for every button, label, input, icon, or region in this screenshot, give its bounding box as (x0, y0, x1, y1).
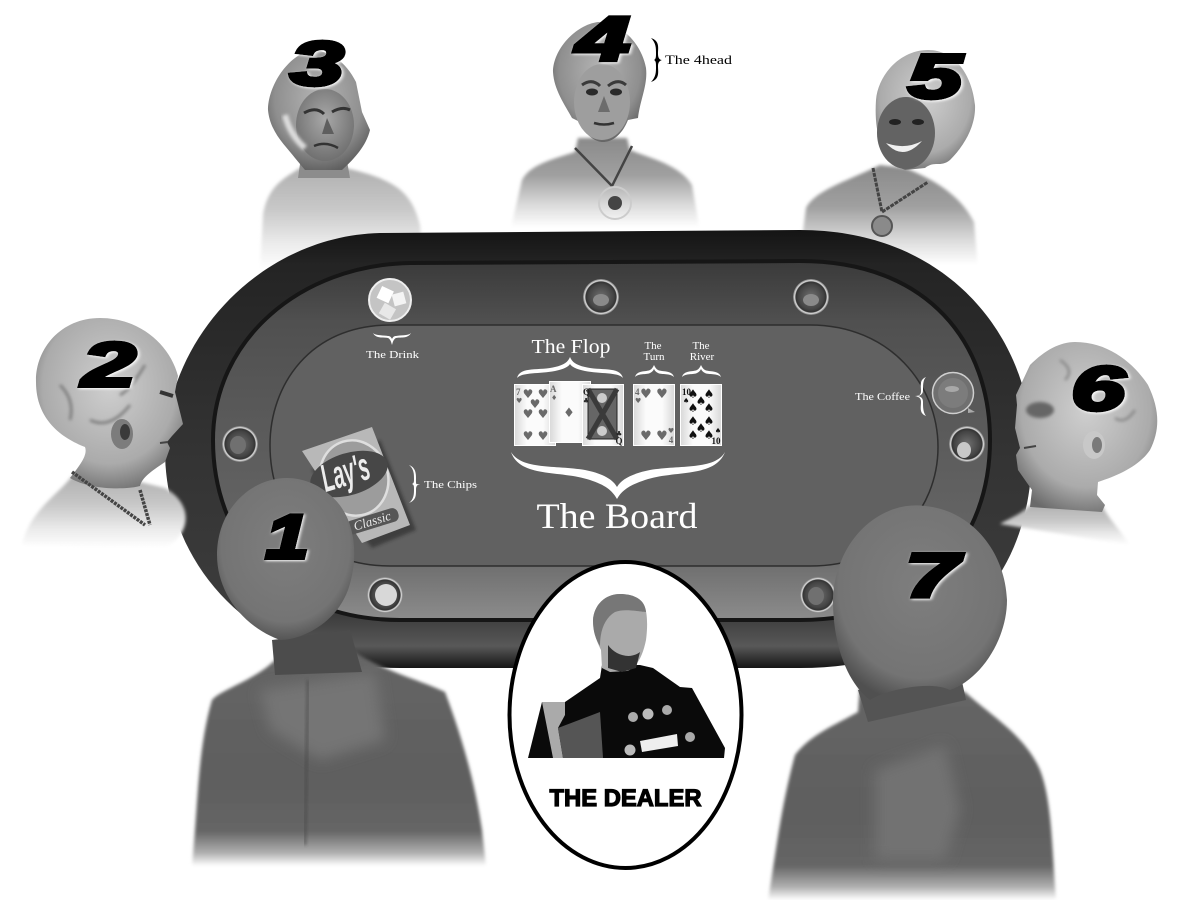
label: the flop: The Flop (532, 336, 610, 358)
player 7 (768, 505, 1056, 900)
card: ten of spades (the river): ♠ (688, 414, 698, 428)
card: ace of diamonds: ♦ (551, 394, 557, 402)
number 2: 2 (80, 331, 136, 400)
brace: drink (373, 333, 411, 345)
label: the coffee: The Coffee (855, 391, 910, 403)
card: seven of hearts: ♥ (538, 387, 548, 401)
cup holder (800, 577, 836, 613)
dealer label: THE DEALER (550, 785, 702, 812)
card: four of hearts (the turn): 4 (669, 435, 674, 445)
brace: coffee (915, 377, 926, 416)
card: ten of spades (the river): ♠ (704, 414, 714, 428)
card: ten of spades (the river): ♠ (688, 387, 698, 401)
label: the turn: The (644, 340, 662, 352)
card: four of hearts (the turn): ♥ (640, 429, 652, 444)
card: ten of spades (the river): ♠ (683, 397, 689, 405)
cup holder (367, 577, 403, 613)
card: four of hearts (the turn): ♥ (656, 387, 668, 402)
card: ten of spades (the river): ♠ (696, 394, 706, 408)
wood rail (213, 261, 990, 620)
card: ten of spades (the river): 10 (682, 387, 692, 397)
cup holder with ice (369, 279, 411, 321)
bag of chips (302, 427, 416, 548)
number 4: 4 (574, 5, 630, 74)
card: seven of hearts (514, 384, 556, 446)
number 7: 7 (905, 542, 964, 611)
player 4 (510, 22, 700, 232)
card: seven of hearts: ♥ (523, 387, 533, 401)
label: the turn: Turn (644, 351, 665, 363)
label: the drink: The Drink (366, 349, 420, 361)
dealer oval (510, 562, 742, 868)
card: queen of clubs (582, 384, 624, 446)
number 1: 1 (265, 501, 309, 571)
player 6 (1000, 342, 1157, 545)
card: seven of hearts: ♥ (530, 397, 540, 411)
cup holder (222, 426, 258, 462)
card: ten of spades (the river): ♠ (715, 427, 721, 435)
card: seven of hearts: 7 (516, 387, 521, 397)
card: four of hearts (the turn): ♥ (668, 427, 674, 435)
card: seven of hearts: ♥ (516, 397, 522, 405)
brace: turn (635, 365, 674, 377)
poker table (165, 230, 1032, 668)
label: the chips: The Chips (424, 479, 477, 491)
card: ten of spades (the river): ♠ (704, 428, 714, 442)
card: queen of clubs: Q (615, 436, 623, 446)
brace: river (682, 365, 721, 377)
card: four of hearts (the turn): 4 (635, 387, 640, 397)
card: four of hearts (the turn): ♥ (635, 397, 641, 405)
chips logo: Lay's (315, 444, 375, 501)
card: ten of spades (the river): 10 (712, 436, 721, 446)
card: four of hearts (the turn): ♥ (656, 429, 668, 444)
label: the 4head: The 4head (665, 53, 733, 67)
coffee cup (932, 372, 975, 414)
felt (270, 325, 938, 566)
brace: flop (517, 357, 623, 378)
player 2 (22, 318, 186, 548)
card: queen of clubs: ♣ (583, 397, 589, 405)
card: seven of hearts: ♥ (523, 429, 533, 443)
label: the river: River (690, 351, 715, 363)
card: ace of diamonds: ♦ (563, 406, 575, 421)
chips flavour: Classic (352, 508, 393, 534)
brace: chips (409, 465, 420, 503)
card: ten of spades (the river): ♠ (704, 387, 714, 401)
card: ace of diamonds: A (550, 384, 557, 394)
cup holder (583, 279, 619, 315)
number 6: 6 (1071, 355, 1126, 424)
card: queen of clubs: ♣ (616, 430, 622, 438)
player 1 (192, 478, 486, 866)
cup holder (949, 426, 985, 462)
player 3 (260, 50, 424, 270)
card: four of hearts (the turn) (634, 384, 674, 446)
label: the river: The (692, 340, 710, 352)
card: queen of clubs: Q (583, 387, 590, 397)
card: four of hearts (the turn): ♥ (640, 387, 652, 402)
brace: the board (511, 452, 725, 499)
card: seven of hearts: ♥ (523, 407, 533, 421)
number 3: 3 (290, 30, 344, 99)
card: ten of spades (the river): ♠ (688, 401, 698, 415)
cards: the flop (514, 382, 624, 446)
label: the board: The Board (536, 496, 698, 536)
cup holder (793, 279, 829, 315)
card: seven of hearts: ♥ (538, 429, 548, 443)
table rim (165, 230, 1032, 668)
player 5 (798, 50, 978, 270)
card: ten of spades (the river): ♠ (696, 421, 706, 435)
card: ace of diamonds (550, 382, 590, 442)
card: seven of hearts: ♥ (538, 407, 548, 421)
brace: 4head (651, 38, 662, 82)
dealer figure (528, 594, 725, 758)
card: ten of spades (the river) (680, 384, 722, 446)
number 5: 5 (908, 43, 963, 112)
card: ten of spades (the river): ♠ (704, 401, 714, 415)
card: ten of spades (the river): ♠ (688, 428, 698, 442)
